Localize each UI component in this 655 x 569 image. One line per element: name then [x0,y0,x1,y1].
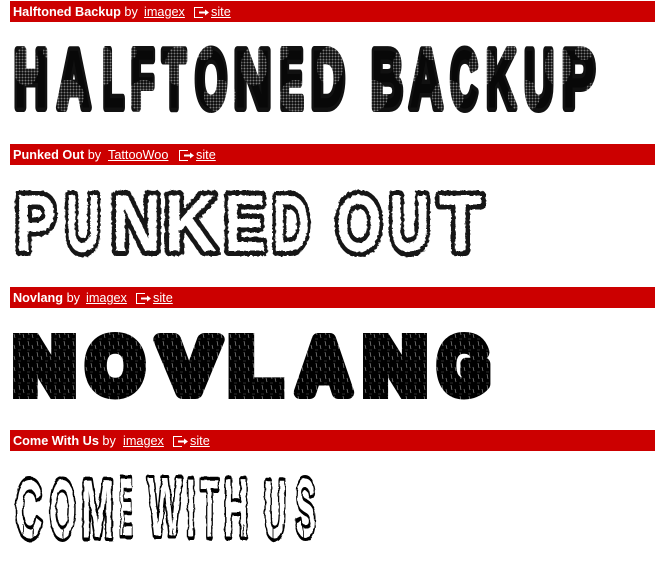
header bar: Halftoned Backup: imagex [144,5,185,19]
sample: Novlang: G [439,324,489,410]
sample: Halftoned Backup [10,32,600,126]
sample: Novlang: N [364,324,426,410]
sample: Punked Out: T [439,179,482,269]
sample: Halftoned Backup: O [195,32,227,126]
header bar: Punked Out [10,144,655,165]
header bar: Novlang [10,287,655,308]
sample: Halftoned Backup: U [524,32,554,126]
header bar: Novlang: Novlang by [13,291,80,305]
sample: Punked Out: U [65,179,100,269]
header bar: Come With Us: site [190,434,210,448]
header bar: Novlang: site [153,291,173,305]
sample: Novlang: O [88,324,143,410]
sample: Novlang: L [230,324,280,410]
sample: Halftoned Backup: D [311,32,345,126]
sample: Punked Out: U [389,179,430,269]
sample: Halftoned Backup: C [450,32,478,126]
sample: Halftoned Backup: H [14,32,48,126]
sample: Punked Out: K [164,179,217,269]
header bar: Come With Us [10,430,655,451]
header bar: Halftoned Backup: Halftoned Backup by [13,5,138,19]
font samples: S [296,462,316,554]
sample: Come With Us: H [224,462,248,554]
sample: Halftoned Backup: A [57,32,91,126]
header bar: Punked Out: site [196,148,216,162]
sample: Halftoned Backup: K [486,32,516,126]
sample: Punked Out: N [111,179,161,269]
header bar: Come With Us: Come With Us by [13,434,116,448]
sample: Come With Us: E [120,460,132,554]
sample: Punked Out [15,179,482,269]
sample: Halftoned Backup: A [409,32,443,126]
sample: Come With Us: M [81,462,114,556]
sample: Punked Out: D [272,179,310,269]
sample: Come With Us: T [200,462,219,554]
sample: Come With Us [15,460,316,556]
sample: Novlang: A [298,324,350,410]
sample: Halftoned Backup: T [162,32,186,126]
sample: Halftoned Backup: F [131,32,154,126]
header bar: Punked Out: Punked Out by [13,148,101,162]
sample: Come With Us: C [15,462,43,556]
sample: Come With Us: I [186,462,196,554]
header bar: Halftoned Backup: site [211,5,231,19]
header bar: Novlang: imagex [86,291,127,305]
sample: Novlang [10,324,494,410]
sample: Halftoned Backup: B [371,32,403,126]
sample: Punked Out: E [224,179,266,269]
sample: Come With Us: U [264,462,286,556]
sample: Come With Us: O [49,462,76,556]
header bar: Punked Out: TattooWoo [108,148,168,162]
sample: Novlang: N [14,324,74,410]
sample: Come With Us: W [148,460,182,554]
sample: Punked Out: O [336,179,382,269]
header bar: Halftoned Backup [10,1,655,22]
sample: Halftoned Backup: E [280,32,303,126]
sample: Halftoned Backup: P [562,32,595,126]
sample: Punked Out: P [15,179,56,269]
sample: Novlang: V [160,324,218,410]
sample: Halftoned Backup: L [103,32,124,126]
header bar: Come With Us: imagex [123,434,164,448]
sample: Halftoned Backup: N [234,32,271,126]
